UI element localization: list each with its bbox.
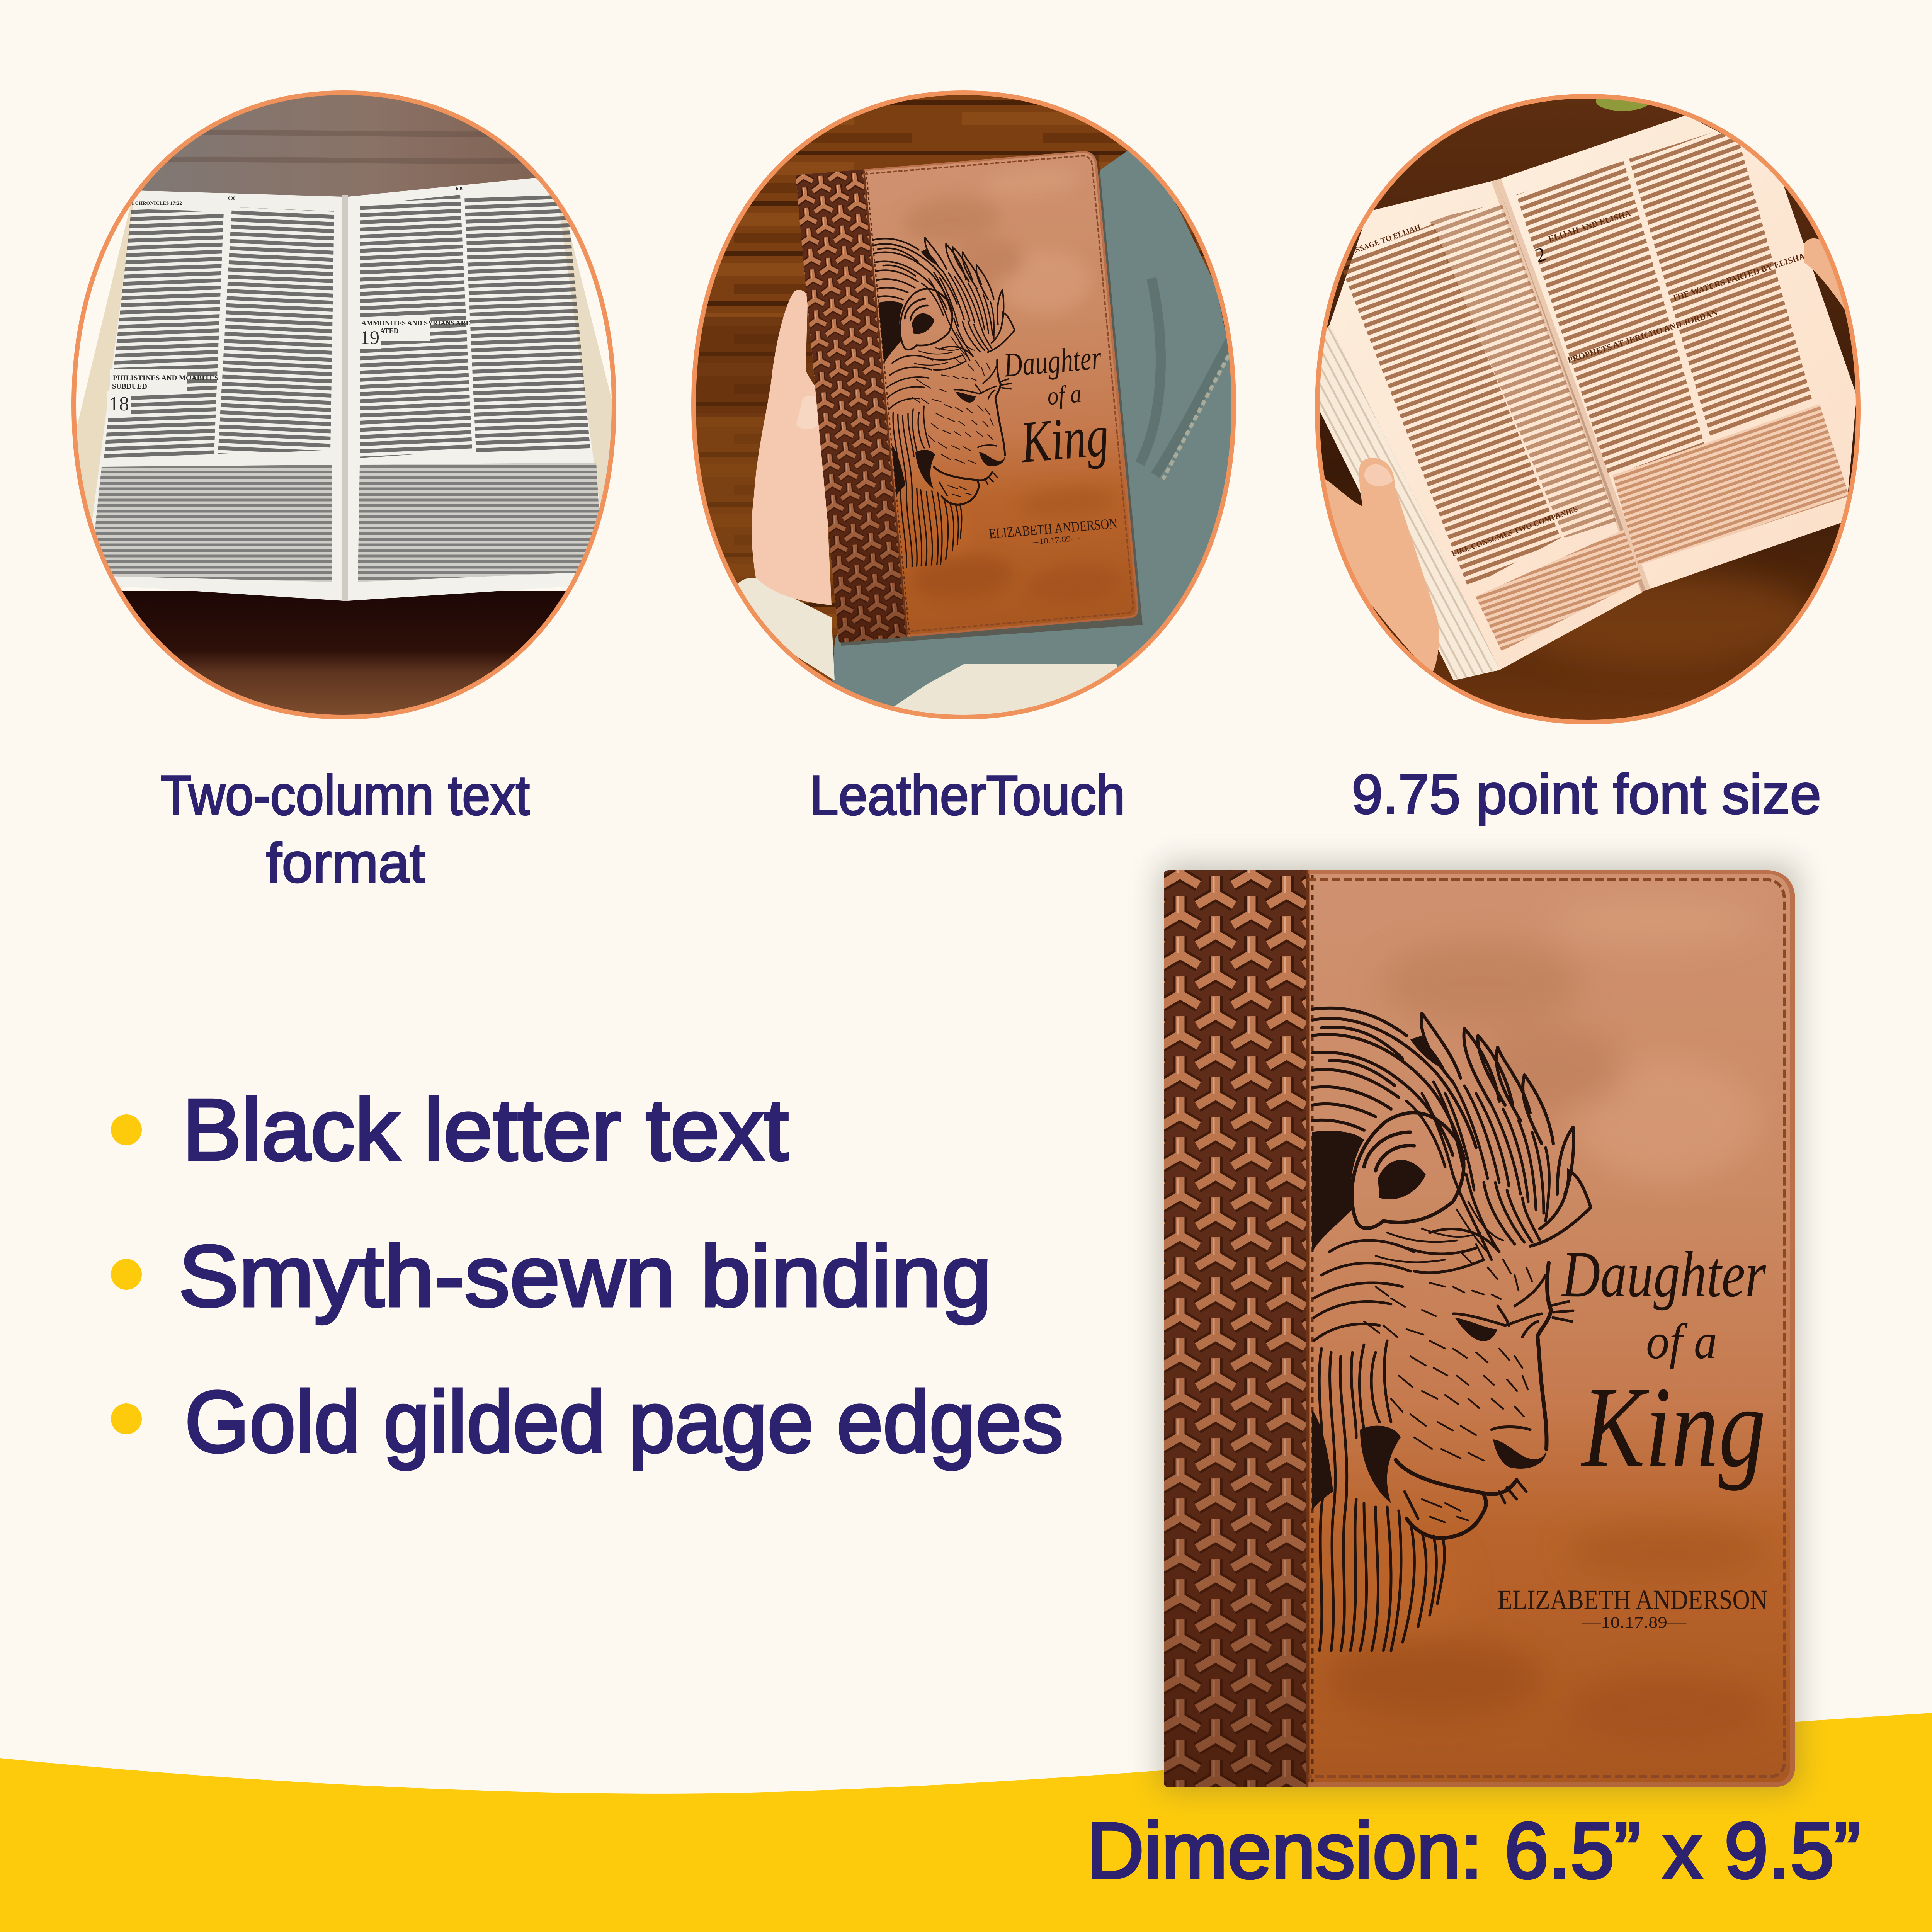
panel: hand holding LeatherTouch bible photo xyxy=(688,89,1240,723)
cover title: of a xyxy=(1646,1314,1717,1369)
heading on page: ELIJAH AND ELISHA xyxy=(1547,208,1632,244)
yellow wave footer band xyxy=(0,1713,1932,1932)
cover art with spine pattern and lion xyxy=(1163,867,1797,1789)
heading on page: 2 xyxy=(1532,243,1549,267)
page headings xyxy=(107,185,471,415)
heading on page: PROPHETS AT JERICHO AND JORDAN xyxy=(1566,307,1719,365)
panel: hands holding open bible photo xyxy=(1314,92,1862,726)
book title text: —10.17.89— xyxy=(1029,534,1080,547)
page headings: 1 CHRONICLES 17:22 xyxy=(131,200,182,206)
page edge stack xyxy=(1320,325,1500,680)
left hand xyxy=(1321,458,1439,674)
page headings: AMMONITES AND SYRIANS ARE xyxy=(361,319,471,327)
caption: LeatherTouch: LeatherTouch xyxy=(810,764,1125,827)
page headings: SUBDUED xyxy=(112,383,147,391)
caption: two-column text format xyxy=(160,764,530,894)
text columns right page xyxy=(360,195,472,458)
book title text xyxy=(972,339,1119,550)
cover title: Daughter xyxy=(1561,1238,1766,1311)
page headings: 609 xyxy=(456,185,464,191)
book cover xyxy=(798,151,1143,646)
book title text: ELIZABETH ANDERSON xyxy=(988,515,1118,542)
dimension label: Dimension: 6.5” x 9.5” xyxy=(1087,1806,1861,1895)
page headings: DEFEATED xyxy=(361,327,399,335)
jeans xyxy=(832,148,1240,719)
heading on page: THE WATERS PARTED BY ELISHA xyxy=(1671,251,1806,303)
page headings: PHILISTINES AND MOABITES xyxy=(113,374,218,382)
heading on page xyxy=(1342,208,1806,558)
heading on page: FIRE CONSUMES TWO COMPANIES xyxy=(1451,505,1579,558)
hand xyxy=(752,290,832,605)
footnotes left page xyxy=(90,465,332,582)
page headings: 19 xyxy=(360,327,379,348)
page headings: 608 xyxy=(228,195,236,201)
bullet: black letter text: Black letter text xyxy=(182,1081,789,1178)
caption: 9.75 point font size: 9.75 point font size xyxy=(1352,763,1821,825)
book title text: of a xyxy=(1046,379,1082,410)
cover name and date: —10.17.89— xyxy=(1582,1614,1687,1631)
sleeve xyxy=(737,578,835,680)
cover title: King xyxy=(1580,1363,1766,1492)
heading on page: MESSAGE TO ELIJAH xyxy=(1342,223,1422,259)
cover name and date xyxy=(1498,1584,1767,1631)
footnotes right page xyxy=(358,463,602,582)
right hand xyxy=(1804,238,1862,321)
bullet: smyth-sewn binding: Smyth-sewn binding xyxy=(179,1227,992,1325)
caption: two-column text format: format xyxy=(266,832,425,894)
book title text: Daughter xyxy=(1002,339,1103,384)
caption: two-column text format: Two-column text xyxy=(160,764,530,827)
text columns xyxy=(1339,224,1561,588)
cover name and date: ELIZABETH ANDERSON xyxy=(1498,1584,1767,1615)
sweater bottom xyxy=(876,664,1121,723)
footnotes xyxy=(1476,530,1642,651)
bullet: gold gilded page edges: Gold gilded page edges xyxy=(185,1373,1063,1470)
cover title xyxy=(1561,1238,1766,1492)
book title text: King xyxy=(1017,403,1111,476)
panel: open bible two-column photo xyxy=(70,89,618,723)
page headings: 18 xyxy=(109,393,129,415)
panel: large leather bible cover xyxy=(1159,864,1799,1791)
text columns left page xyxy=(104,209,224,461)
bullet list: features xyxy=(111,1081,1063,1470)
